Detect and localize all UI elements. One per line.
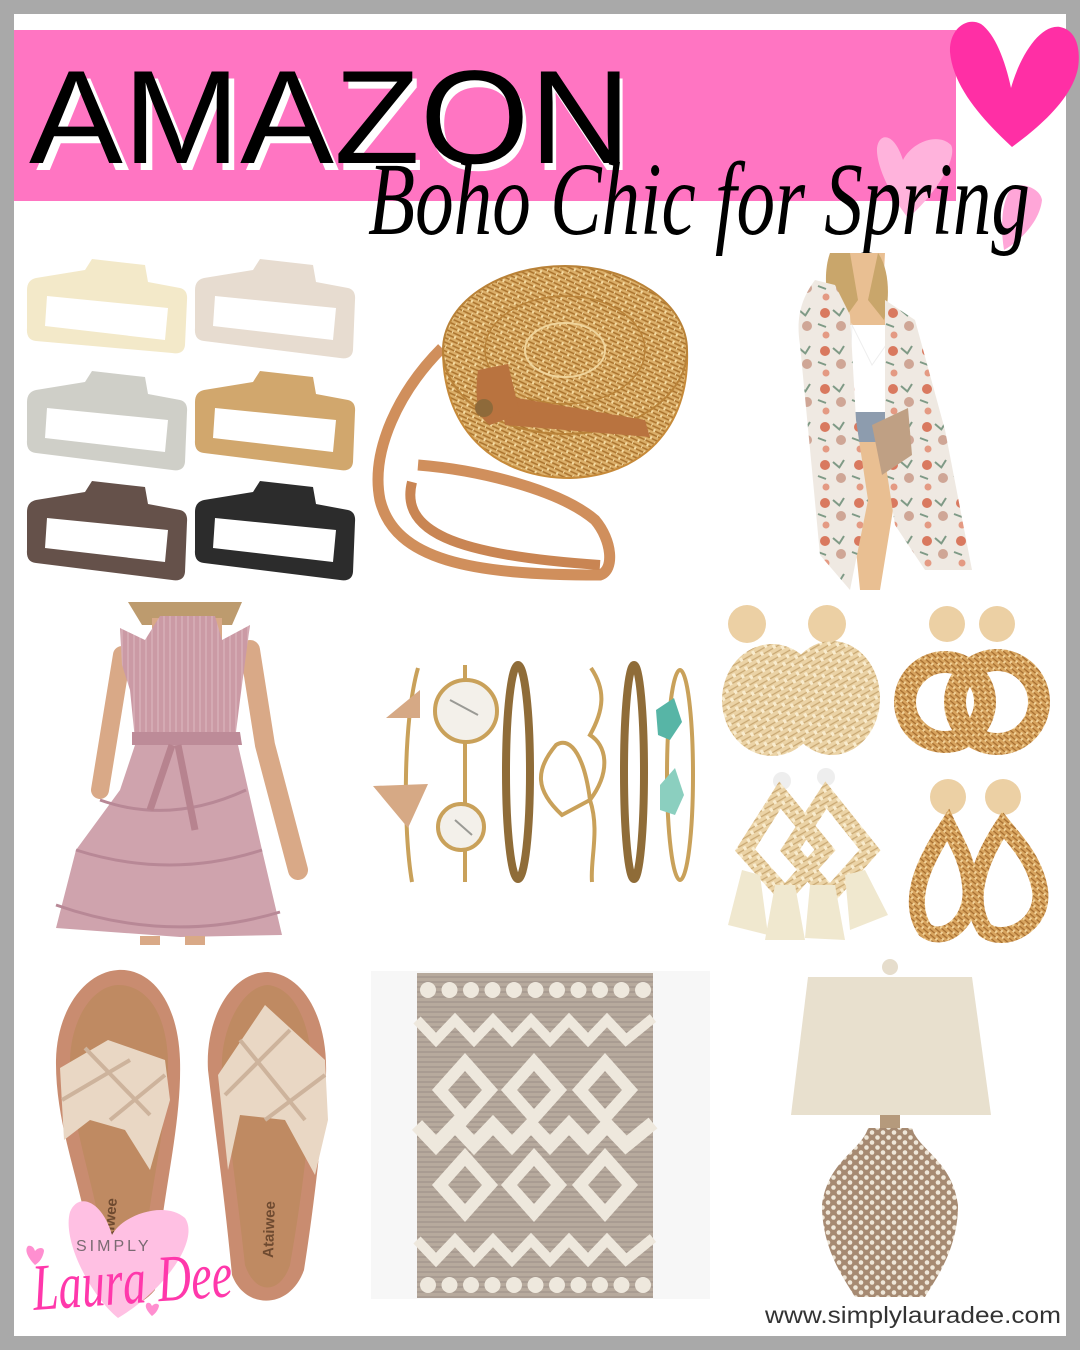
icon: small pink heart xyxy=(1002,185,1042,250)
pink title banner xyxy=(14,30,956,201)
title: AMAZON: AMAZON xyxy=(36,51,634,199)
product: gold bracelet set xyxy=(373,665,693,882)
product: woven sandals xyxy=(56,970,328,1304)
website url: www.simplylauradee.com xyxy=(764,1302,1061,1328)
logo: Simply Laura Dee: SIMPLY xyxy=(76,1238,152,1255)
product: pink tiered dress xyxy=(56,602,298,945)
product: woven sandals: Ataiwee xyxy=(260,1201,279,1258)
icon: large pink heart xyxy=(950,22,1079,147)
logo: Simply Laura Dee xyxy=(26,1201,235,1325)
product: hair claw clips xyxy=(27,259,355,580)
logo: Simply Laura Dee: Laura Dee xyxy=(29,1238,235,1325)
title: AMAZON: AMAZON xyxy=(29,44,631,192)
product: table lamp xyxy=(791,959,991,1297)
product: floral kimono on model xyxy=(799,253,972,590)
product: round rattan bag xyxy=(378,266,687,575)
icon: light pink heart xyxy=(877,137,952,218)
product: geometric area rug xyxy=(371,971,710,1299)
product: woven sandals: Ataiwee xyxy=(99,1197,121,1255)
product: rattan earrings xyxy=(722,605,1040,940)
